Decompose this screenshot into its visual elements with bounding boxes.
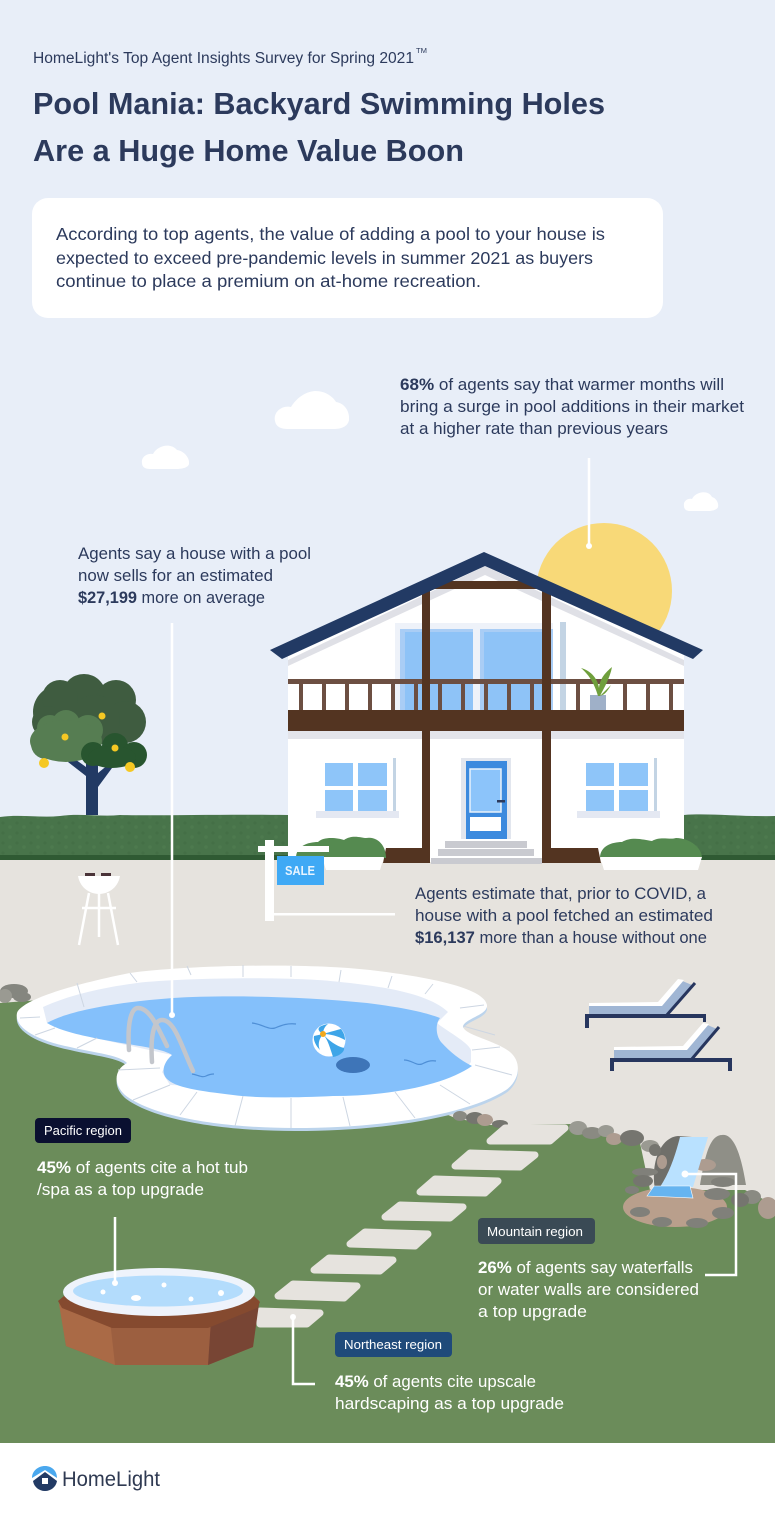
callout: Mountain waterfalls [478, 1259, 699, 1321]
callout: Northeast hardscaping: 45% of agents cite upscale [335, 1373, 536, 1391]
callout: hot tub leader [114, 1217, 116, 1283]
tree [30, 674, 147, 815]
callout: Northeast hardscaping: hardscaping as a top upgrade [335, 1395, 564, 1413]
title [33, 86, 605, 168]
pool ladder [129, 1008, 193, 1071]
waterfall [623, 1135, 746, 1228]
callout: Northeast hardscaping [335, 1373, 564, 1413]
tag: Mountain region [478, 1218, 595, 1244]
callout: surge in pool additions: at a higher rate than previous years [400, 420, 668, 438]
house walls [288, 560, 684, 862]
big rock [700, 1135, 746, 1185]
callout: $16,137: Agents estimate that, prior to COVID, a [415, 885, 707, 903]
dark rock behind falls [654, 1136, 692, 1190]
callout: Pacific hot tub [37, 1159, 248, 1199]
tag: Pacific region: Pacific region [44, 1123, 122, 1138]
lounger back [585, 979, 706, 1028]
callout: hardscaping leader [293, 1317, 315, 1384]
hedge right [684, 814, 775, 860]
rocks beside pool [453, 1111, 508, 1128]
callout: surge in pool additions: bring a surge in pool additions in their market [400, 398, 744, 416]
gable shadow [288, 566, 684, 666]
callout: pool leader [171, 623, 173, 1015]
ball shadow [336, 1057, 370, 1073]
rim shadow [17, 969, 518, 1131]
callout: waterfall leader [685, 1174, 736, 1275]
house [270, 552, 703, 870]
clouds [142, 391, 718, 511]
plant [581, 667, 612, 710]
callout: $27,199: Agents say a house with a pool [78, 545, 311, 563]
pebble bed [623, 1187, 727, 1227]
left planter [296, 837, 386, 870]
right planter [600, 838, 702, 870]
roof [270, 552, 703, 659]
stepping stones [260, 1128, 565, 1324]
left lower window [316, 758, 399, 818]
survey subtitle: HomeLight's Top Agent Insights Survey for Spring 2021 [33, 50, 414, 67]
sun [536, 523, 672, 659]
callout: Mountain waterfalls: or water walls are considered [478, 1281, 699, 1299]
sale sign: SALE [285, 863, 315, 878]
title: Are a Huge Home Value Boon [33, 133, 464, 168]
lounger front [610, 1023, 732, 1071]
steps [431, 841, 542, 864]
right lower window [577, 758, 660, 818]
pool coping [17, 966, 518, 1128]
hot tub [58, 1268, 260, 1365]
footer [0, 1443, 775, 1515]
callout: $16,137: house with a pool fetched an estimated [415, 907, 713, 925]
tag: Mountain region: Mountain region [487, 1224, 583, 1239]
sale sign [258, 840, 395, 921]
beach ball [312, 1024, 346, 1057]
callout: surge in pool additions [400, 376, 744, 438]
door [461, 758, 511, 839]
survey subtitle: TM [416, 48, 427, 55]
callout: sun leader [588, 458, 590, 546]
balcony deck [288, 710, 684, 731]
barbecue grill [78, 873, 120, 945]
callout: surge in pool additions: 68% of agents say that warmer months will [400, 376, 724, 394]
splash pool [647, 1186, 693, 1198]
panel: intro card: According to top agents, the value of adding a pool to your house is [56, 224, 605, 244]
paving ground [0, 860, 775, 1220]
rock edging [569, 1121, 775, 1219]
tag: Pacific region [35, 1118, 131, 1143]
pool water [47, 996, 472, 1097]
callout: $27,199 [78, 545, 311, 607]
panel: intro card: continue to place a premium on at-home recreation. [56, 271, 481, 291]
logo wordmark: HomeLight [62, 1468, 160, 1491]
tag: Northeast region [335, 1332, 452, 1357]
balcony rail [288, 679, 684, 711]
icon: HomeLight logo [32, 1466, 57, 1491]
hedge left [0, 815, 288, 860]
tag: Northeast region: Northeast region [344, 1337, 442, 1352]
pool [17, 965, 518, 1131]
callout: Pacific hot tub: /spa as a top upgrade [37, 1181, 204, 1199]
boulders [625, 1144, 735, 1228]
pool inner wall [43, 978, 471, 1090]
grass lawn [0, 1000, 775, 1443]
callout: $16,137: $16,137 more than a house without one [415, 929, 707, 947]
panel: intro card: expected to exceed pre-pandemic levels in summer 2021 as buyers [56, 248, 593, 268]
leader dots [112, 543, 688, 1320]
ripples [192, 1023, 436, 1077]
callout: Mountain waterfalls: a top upgrade [478, 1303, 587, 1321]
callout: Mountain waterfalls: 26% of agents say waterfalls [478, 1259, 693, 1277]
callout: $16,137 [415, 885, 713, 947]
rocks left of pool [0, 984, 31, 1003]
timber posts [383, 581, 601, 863]
callout: $27,199: $27,199 more on average [78, 589, 265, 607]
callout: $27,199: now sells for an estimated [78, 567, 273, 585]
title: Pool Mania: Backyard Swimming Holes [33, 86, 605, 121]
falling water [660, 1137, 708, 1187]
panel: intro card [32, 198, 663, 318]
coping tile joints [20, 965, 512, 1128]
callout: Pacific hot tub: 45% of agents cite a hot tub [37, 1159, 248, 1177]
upper window [395, 622, 566, 710]
